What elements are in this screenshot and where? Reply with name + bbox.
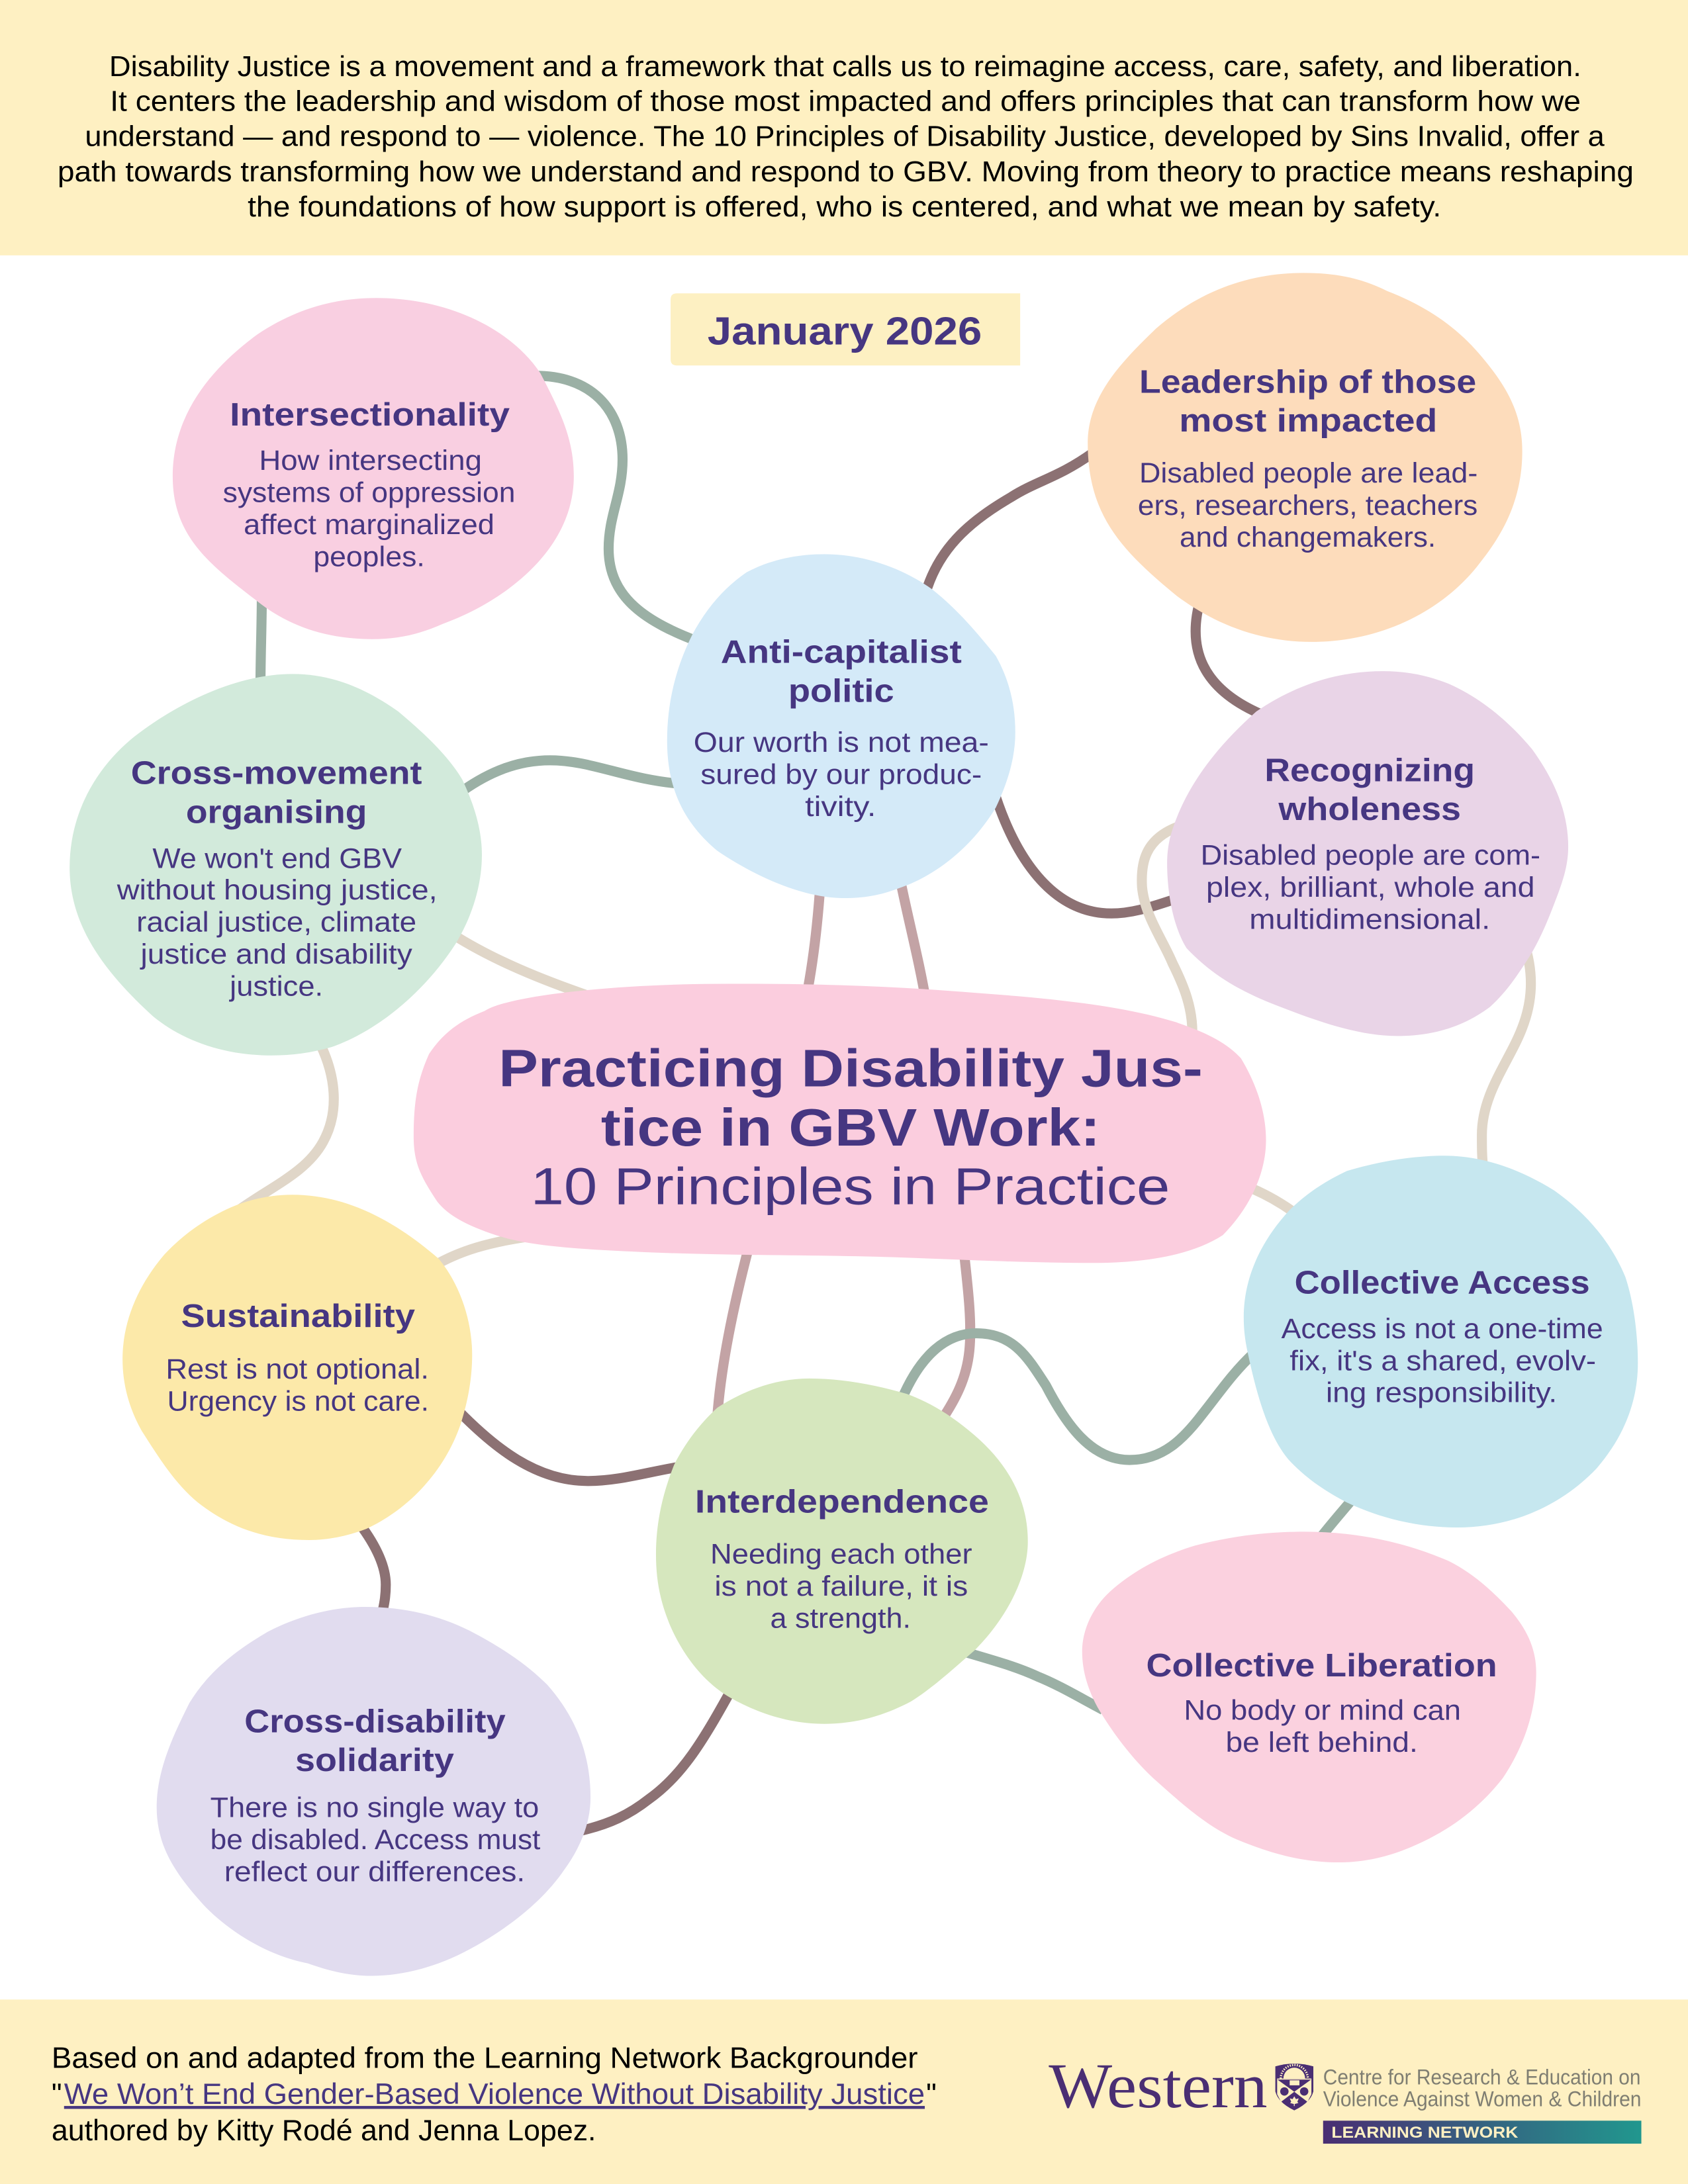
panel: cross-movement organising: Cross-movement: [131, 756, 422, 792]
panel: cross-disability solidarity: reflect our differences.: [224, 1856, 525, 1888]
intro text: the foundations of how support is offered, who is centered, and what we mean by safety.: [248, 191, 1441, 223]
connector: anti-capitalist to recognizing wholeness: [993, 788, 1178, 913]
logo: Western: Western: [1049, 2050, 1268, 2121]
panel: collective liberation: No body or mind can: [1184, 1694, 1461, 1726]
connector: cross-movement to anti-capitalist: [463, 760, 682, 791]
footer credit text: [52, 2042, 937, 2147]
panel: intersectionality: How intersecting: [259, 445, 482, 477]
connector: leadership to anti-capitalist: [925, 453, 1094, 596]
connector: recognizing wholeness to title: [1142, 827, 1192, 1037]
panel: interdependence: is not a failure, it is: [714, 1570, 968, 1602]
logo: Western: [1049, 2050, 1642, 2144]
panel: recognizing wholeness: multidimensional.: [1249, 903, 1490, 935]
panel: collective access: fix, it's a shared, evolv-: [1289, 1345, 1596, 1377]
centre name: Violence Against Women & Children: [1323, 2087, 1642, 2111]
panel: leadership of those most impacted: and changemakers.: [1180, 522, 1436, 553]
panel: sustainability: Rest is not optional.: [165, 1353, 429, 1385]
footer credit text: authored by Kitty Rodé and Jenna Lopez.: [52, 2115, 596, 2147]
intro text: [58, 51, 1634, 223]
panel: intersectionality: Intersectionality: [230, 397, 510, 433]
connector: anti-capitalist to title right: [900, 877, 926, 1003]
connector: sustainability to interdependence: [455, 1408, 682, 1481]
panel: recognizing wholeness: Disabled people are com-: [1201, 840, 1540, 872]
panel: intersectionality: [173, 298, 574, 639]
connector: cross-movement to title: [453, 934, 592, 997]
panel: cross-disability solidarity: solidarity: [295, 1743, 454, 1778]
icon: crest: [1276, 2064, 1313, 2111]
panel: central title: 10 Principles in Practice: [531, 1157, 1170, 1215]
panel: cross-movement organising: racial justice, climate: [136, 907, 416, 938]
panel: collective access: Access is not a one-time: [1282, 1313, 1603, 1345]
panel: central title: [414, 983, 1266, 1263]
panel: anti-capitalist politic: tivity.: [805, 791, 876, 823]
centre name: [1323, 2064, 1642, 2111]
panel: cross-movement organising: justice.: [228, 970, 323, 1002]
panel: cross-disability solidarity: be disabled. Access must: [211, 1824, 540, 1856]
panel: collective access: Collective Access: [1295, 1265, 1590, 1301]
connector: intersectionality to cross-movement: [260, 592, 262, 689]
centre name: Centre for Research & Education on: [1323, 2064, 1640, 2089]
connector: collective access to collective liberation: [1317, 1492, 1358, 1541]
panel: cross-movement organising: without housing justice,: [117, 874, 438, 906]
intro text: path towards transforming how we understand and respond to GBV. Moving from theory to practice means reshaping: [58, 156, 1634, 188]
intro text: understand — and respond to — violence. The 10 Principles of Disability Justice, developed by Sins Invalid, offer a: [85, 121, 1605, 153]
panel: intersectionality: systems of oppression: [223, 477, 515, 509]
panel: intro band: [0, 0, 1688, 255]
intro text: Disability Justice is a movement and a framework that calls us to reimagine access, care, safety, and liberation.: [109, 51, 1581, 83]
panel: cross-movement organising: justice and disability: [139, 938, 412, 970]
panel: cross-movement organising: We won't end GBV: [152, 843, 402, 875]
panel: intersectionality: peoples.: [313, 541, 425, 573]
panel: anti-capitalist politic: [667, 554, 1015, 898]
connector: title to interdependence left: [718, 1250, 748, 1418]
learning network bar: LEARNING NETWORK: [1331, 2124, 1519, 2142]
connector: title to collective access: [1246, 1187, 1302, 1218]
panel: recognizing wholeness: Recognizing: [1264, 752, 1475, 788]
panel: sustainability: [122, 1195, 472, 1540]
panel: anti-capitalist politic: Anti-capitalist: [721, 634, 962, 670]
panel: cross-movement organising: organising: [186, 794, 367, 830]
panel: collective access: ing responsibility.: [1326, 1377, 1557, 1409]
connector: interdependence to cross-disability: [579, 1685, 734, 1831]
panel: recognizing wholeness: [1167, 671, 1568, 1036]
footer credit text: ": [52, 2078, 62, 2111]
connector: sustainability to title: [432, 1236, 530, 1267]
panel: collective liberation: be left behind.: [1225, 1727, 1418, 1758]
panel: intersectionality: affect marginalized: [244, 509, 494, 541]
footer credit text: We Won’t End Gender-Based Violence Without Disability Justice: [64, 2078, 925, 2111]
panel: cross-disability solidarity: [157, 1607, 590, 1976]
date label: [671, 293, 1020, 365]
connector: title to interdependence right: [941, 1250, 970, 1420]
connector: interdependence to collective access: [901, 1334, 1254, 1460]
panel: interdependence: [656, 1379, 1028, 1724]
connector: anti-capitalist to title left: [806, 884, 820, 997]
panel: anti-capitalist politic: sured by our produc-: [700, 759, 982, 791]
panel: leadership of those most impacted: [1088, 273, 1523, 642]
panel: sustainability: Urgency is not care.: [167, 1385, 429, 1417]
connector: recognizing wholeness to collective access: [1482, 941, 1531, 1169]
panel: recognizing wholeness: wholeness: [1278, 792, 1461, 827]
footer credit text: Based on and adapted from the Learning Network Backgrounder: [52, 2042, 918, 2074]
connectors between principles: [237, 376, 1531, 1831]
panel: leadership of those most impacted: most impacted: [1179, 403, 1437, 439]
panel: leadership of those most impacted: ers, researchers, teachers: [1138, 490, 1477, 522]
panel: collective access: [1244, 1156, 1638, 1527]
panel: interdependence: Interdependence: [695, 1484, 989, 1520]
panel: cross-movement organising: [70, 674, 482, 1056]
panel: collective liberation: [1082, 1531, 1536, 1862]
connector: intersectionality to anti-capitalist: [530, 376, 699, 642]
panel: interdependence: Needing each other: [710, 1539, 972, 1570]
panel: cross-disability solidarity: Cross-disability: [244, 1704, 506, 1739]
date label: January 2026: [708, 310, 982, 353]
panel: cross-disability solidarity: There is no single way to: [211, 1792, 539, 1824]
footer credit text: ": [926, 2078, 937, 2111]
panel: interdependence: a strength.: [770, 1603, 911, 1635]
panel: leadership of those most impacted: Leadership of those: [1139, 364, 1476, 400]
panel: collective liberation: Collective Liberation: [1147, 1648, 1497, 1684]
panel: central title: Practicing Disability Jus-: [498, 1039, 1203, 1098]
learning network bar: [1323, 2120, 1642, 2144]
panel: central title: tice in GBV Work:: [601, 1098, 1100, 1157]
connector: leadership to recognizing wholeness: [1196, 599, 1264, 715]
panel: leadership of those most impacted: Disabled people are lead-: [1139, 457, 1477, 489]
connector: sustainability to cross-disability: [359, 1524, 386, 1615]
connector: cross-movement to sustainability: [237, 1044, 334, 1211]
panel: anti-capitalist politic: Our worth is not mea-: [694, 727, 989, 758]
panel: footer band: [0, 1999, 1688, 2184]
intro text: It centers the leadership and wisdom of those most impacted and offers principles that can transform how we: [110, 86, 1581, 118]
panel: sustainability: Sustainability: [181, 1298, 415, 1334]
connector: interdependence to collective liberation: [959, 1650, 1103, 1710]
panel: anti-capitalist politic: politic: [788, 673, 894, 709]
panel: recognizing wholeness: plex, brilliant, whole and: [1206, 872, 1535, 903]
